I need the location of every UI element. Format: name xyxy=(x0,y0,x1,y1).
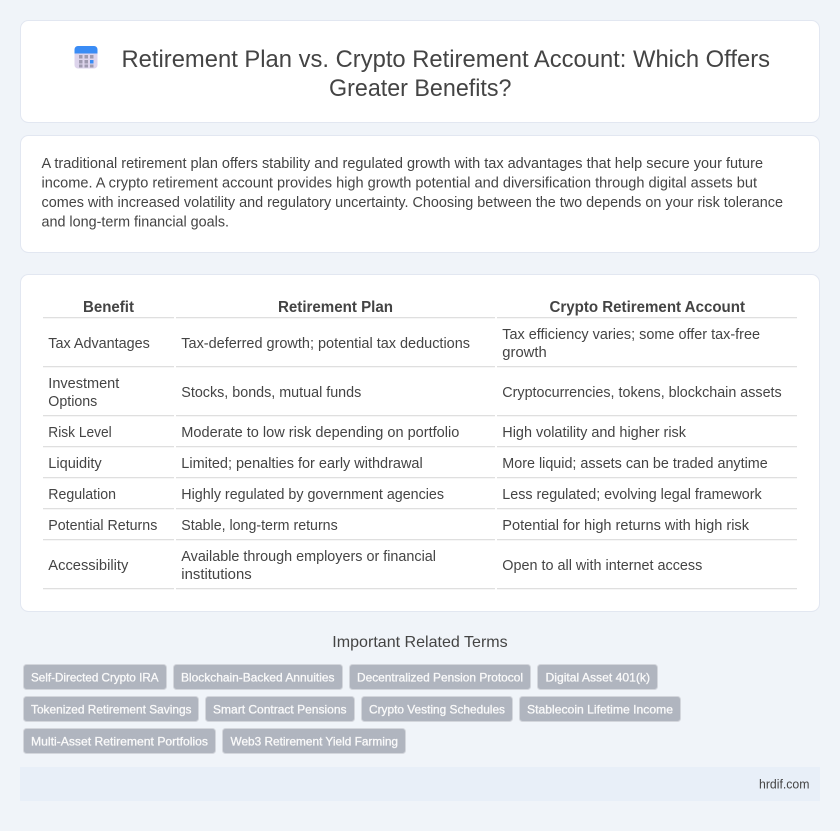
row: liquidity: More liquid; assets can be traded anytime xyxy=(502,456,768,472)
footer xyxy=(20,767,820,801)
tag xyxy=(222,728,406,754)
tag xyxy=(24,664,166,690)
row: risk level: Moderate to low risk depending on portfolio xyxy=(181,425,459,441)
panel: introduction text: comes with increased volatility and regulatory uncertainty. Choosing between the two depends on your risk tolerance xyxy=(42,195,783,211)
row: investment options xyxy=(48,376,782,410)
row: investment options: Cryptocurrencies, tokens, blockchain assets xyxy=(502,385,782,401)
row: risk level xyxy=(48,425,687,441)
row: accessibility xyxy=(48,549,702,583)
panel: title header xyxy=(20,20,820,122)
table header row xyxy=(83,299,745,316)
title: Greater Benefits? xyxy=(329,75,512,102)
table header row: Crypto Retirement Account xyxy=(550,299,745,316)
row: tax advantages: growth xyxy=(502,345,547,361)
tag: Web3 Retirement Yield Farming xyxy=(230,734,398,748)
row: potential returns: Stable, long-term returns xyxy=(181,518,338,534)
row: investment options: Investment xyxy=(48,376,119,392)
row: liquidity: Liquidity xyxy=(48,456,102,472)
row: potential returns xyxy=(48,518,750,534)
row: tax advantages: Tax-deferred growth; potential tax deductions xyxy=(181,336,470,352)
table header row: Retirement Plan xyxy=(278,299,393,316)
tag: Decentralized Pension Protocol xyxy=(357,670,523,684)
tag: Smart Contract Pensions xyxy=(213,702,346,716)
tag xyxy=(24,728,216,754)
row: tax advantages xyxy=(48,327,760,361)
row: liquidity xyxy=(48,456,768,472)
tag xyxy=(350,664,530,690)
row: risk level: Risk Level xyxy=(48,425,112,441)
heading: important related terms: Important Related Terms xyxy=(332,634,508,651)
panel: introduction text xyxy=(20,136,820,252)
row: accessibility: Open to all with internet access xyxy=(502,558,702,574)
tag xyxy=(538,664,658,690)
row: liquidity: Limited; penalties for early withdrawal xyxy=(181,456,423,472)
row: regulation: Regulation xyxy=(48,487,116,503)
tag: Self-Directed Crypto IRA xyxy=(31,670,158,684)
panel: comparison table xyxy=(20,274,820,612)
table header row: Benefit xyxy=(83,299,134,316)
panel: introduction text: income. A crypto retirement account provides high growth potential and diversification through digital assets but xyxy=(42,176,757,192)
tag xyxy=(206,696,354,722)
row: potential returns: Potential for high returns with high risk xyxy=(502,518,750,534)
title xyxy=(122,46,770,102)
tag: Blockchain-Backed Annuities xyxy=(181,670,334,684)
row: investment options: Options xyxy=(48,394,97,410)
icon: calendar xyxy=(74,46,98,68)
tag: Stablecoin Lifetime Income xyxy=(527,702,673,716)
row: accessibility: Available through employers or financial xyxy=(181,549,436,565)
title: Retirement Plan vs. Crypto Retirement Account: Which Offers xyxy=(122,46,770,73)
row: potential returns: Potential Returns xyxy=(48,518,157,534)
row: investment options: Stocks, bonds, mutual funds xyxy=(181,385,361,401)
row: accessibility: Accessibility xyxy=(48,558,129,574)
row: tax advantages: Tax Advantages xyxy=(48,336,150,352)
row: tax advantages: Tax efficiency varies; some offer tax-free xyxy=(502,327,760,343)
row: accessibility: institutions xyxy=(181,567,252,583)
tag xyxy=(520,696,680,722)
row: regulation: Less regulated; evolving legal framework xyxy=(502,487,762,503)
tag xyxy=(174,664,342,690)
tag: Multi-Asset Retirement Portfolios xyxy=(31,734,208,748)
row: regulation: Highly regulated by government agencies xyxy=(181,487,444,503)
tag: Tokenized Retirement Savings xyxy=(31,702,192,716)
tag: Digital Asset 401(k) xyxy=(546,670,650,684)
tag xyxy=(362,696,512,722)
footer: hrdif.com xyxy=(759,776,810,791)
tag: Crypto Vesting Schedules xyxy=(369,702,505,716)
tag xyxy=(24,696,198,722)
tag list xyxy=(24,664,680,754)
panel: introduction text: A traditional retirement plan offers stability and regulated growth with tax advantages that help secure your future xyxy=(42,156,763,172)
row: regulation xyxy=(48,487,762,503)
panel: introduction text: and long-term financial goals. xyxy=(42,214,229,230)
row: risk level: High volatility and higher risk xyxy=(502,425,687,441)
